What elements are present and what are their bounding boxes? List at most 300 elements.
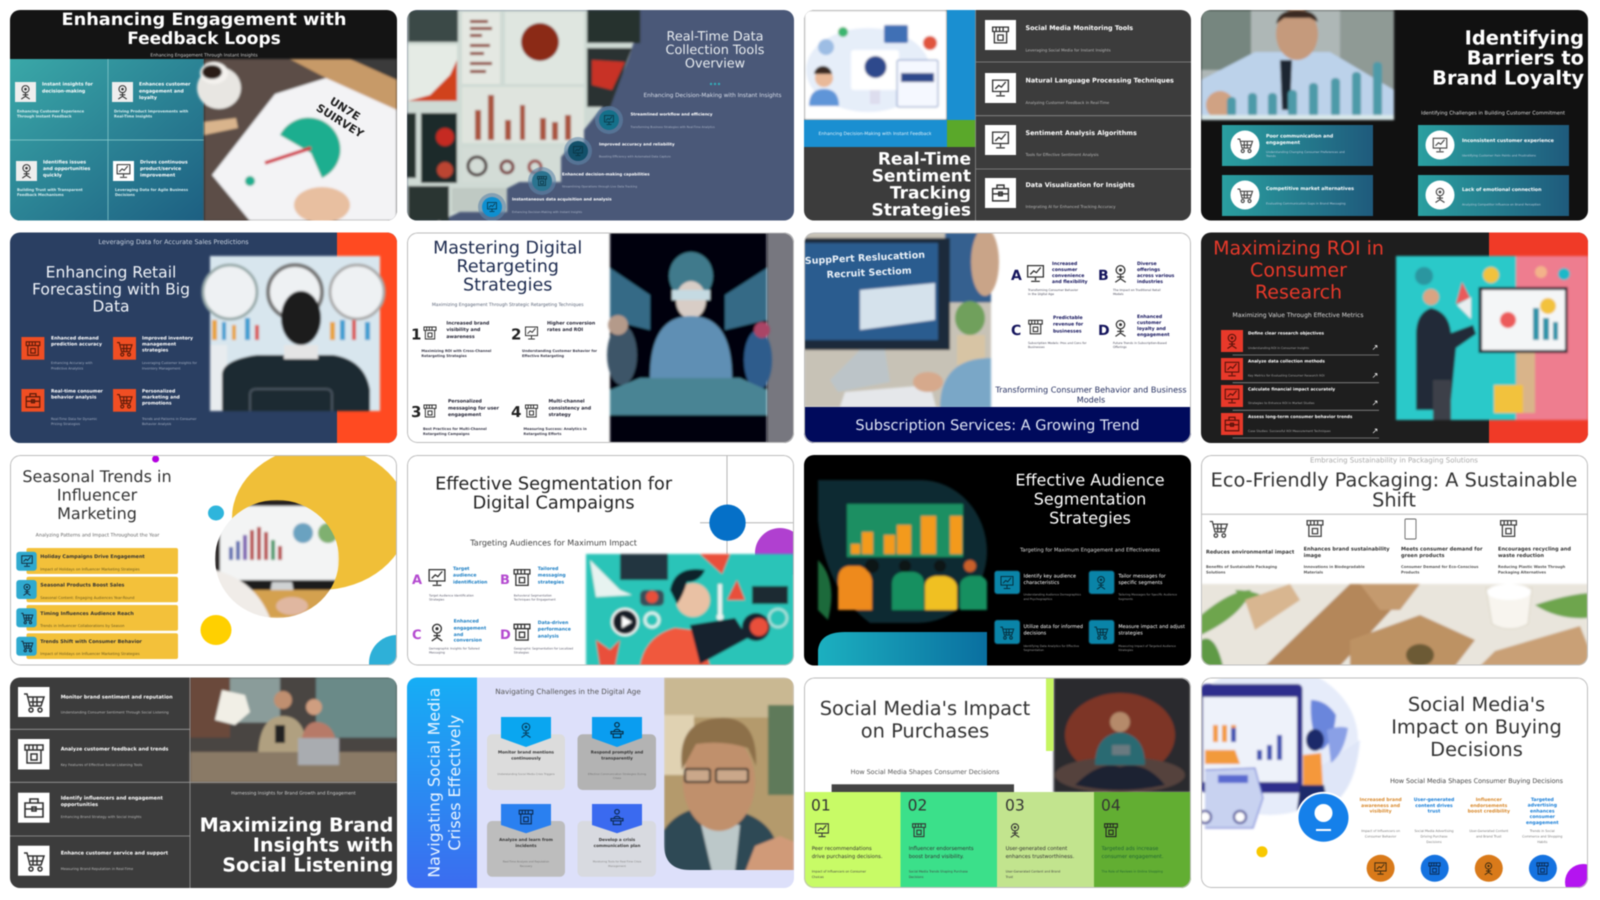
text: issues: quickly bbox=[43, 172, 62, 178]
blue band bbox=[407, 678, 477, 888]
item: inventory: Inventory Management bbox=[142, 366, 181, 370]
title: Influencer bbox=[57, 486, 138, 504]
title: Decisions bbox=[1430, 738, 1523, 761]
item D: Geographic Segmentation for Localized bbox=[514, 646, 573, 650]
item: demand: Predictive Analytics bbox=[51, 366, 84, 370]
bar: timing: Trends in Influencer Collaborations by Season bbox=[39, 624, 125, 628]
item: decisions: Streamlining Operations through Live Data Tracking bbox=[562, 184, 637, 188]
item B: Tailored bbox=[538, 566, 558, 572]
subtitle: Harnessing Insights for Brand Growth and Engagement bbox=[231, 790, 356, 796]
orange band bbox=[337, 232, 397, 443]
item D: D bbox=[1098, 323, 1110, 339]
purple corner bbox=[1565, 864, 1600, 900]
item C: Messaging bbox=[429, 650, 445, 654]
bar: trends bbox=[16, 633, 178, 659]
item D: D bbox=[500, 628, 511, 643]
item 2: Effective Retargeting bbox=[522, 354, 564, 358]
panel: Real-Time Sentiment Tracking Strategies bbox=[804, 10, 1191, 221]
item: workflow: Streamlined workflow and efficiency bbox=[630, 112, 713, 116]
item: real-time behavior: behavior analysis bbox=[51, 394, 97, 400]
column 03: Trust bbox=[1005, 875, 1014, 879]
panel: Social Media's Impact on Purchases bbox=[804, 678, 1191, 888]
item B: Diverse bbox=[1137, 261, 1157, 267]
column: environmental impact bbox=[1206, 522, 1295, 574]
yellow blob bbox=[232, 446, 408, 590]
column: brand sustainability: Materials bbox=[1304, 570, 1324, 574]
item C: Enhanced bbox=[454, 618, 479, 624]
item: personalized marketing: Trends and Patterns in Consumer bbox=[141, 417, 197, 421]
card: respond promptly bbox=[578, 717, 656, 790]
item: real-time behavior: Pricing Strategies bbox=[51, 422, 80, 426]
item 1: awareness bbox=[446, 335, 475, 340]
card: respond promptly: transparently bbox=[601, 756, 633, 761]
panel: Effective Segmentation for Digital Campaigns bbox=[407, 455, 805, 666]
card: analyze incidents: Real-Time Analysis and Reputation bbox=[503, 860, 550, 864]
item: utilize data: Utilize data for informed bbox=[1024, 624, 1083, 630]
column: user-generated trust: trust bbox=[1428, 808, 1441, 814]
row: long-term trends bbox=[1221, 413, 1379, 438]
card: competitive alternatives: Competitive market alternatives bbox=[1266, 186, 1354, 192]
icon: continuous improvement bbox=[113, 161, 134, 181]
item: data visualization: Integrating AI for Enhanced Tracking Accuracy bbox=[1026, 204, 1116, 209]
row: methods: Key Metrics for Evaluating Consumer Research ROI bbox=[1248, 374, 1325, 378]
title: Consumer bbox=[1250, 260, 1347, 282]
title: Social Listening bbox=[222, 854, 393, 876]
icon: workflow bbox=[595, 106, 623, 134]
illustration: videographer bbox=[586, 554, 794, 666]
column: user-generated trust bbox=[1414, 797, 1454, 882]
column 02: Decisions bbox=[909, 875, 924, 879]
item: characteristics: and Psychographics bbox=[1024, 597, 1053, 601]
subtitle: Navigating Challenges in the Digital Age bbox=[495, 687, 641, 696]
item B: Models bbox=[1113, 292, 1124, 296]
row: feedback bbox=[18, 739, 168, 770]
caption: instant insights: Through Instant Feedback bbox=[17, 114, 72, 118]
panel: Seasonal Trends in Influencer Marketing bbox=[10, 446, 425, 691]
item D: Strategies bbox=[514, 650, 530, 654]
title: Shift bbox=[1372, 488, 1416, 512]
item 2 bbox=[511, 320, 597, 358]
item 3: Personalized bbox=[448, 398, 482, 404]
item B: industries bbox=[1137, 279, 1163, 285]
bar: seasonal products: Seasonal Products Boost Sales bbox=[40, 582, 124, 588]
column: influencer credibility bbox=[1468, 797, 1510, 882]
title: Maximizing Brand bbox=[200, 814, 393, 836]
card: analyze incidents bbox=[487, 804, 565, 877]
icon: data visualization bbox=[985, 178, 1016, 208]
row: financial impact bbox=[1221, 385, 1379, 410]
title: Subscription Services: A Growing Trend bbox=[855, 418, 1140, 434]
item 1: Maximizing ROI with Cross-Channel bbox=[421, 349, 491, 353]
item: sentiment: Sentiment Analysis Algorithms bbox=[1026, 129, 1137, 137]
item: acquisition: Enhancing Decision-Making with Instant Insights bbox=[512, 210, 583, 214]
photo: man overwhelmed by apps bbox=[1054, 678, 1191, 793]
title: Tracking bbox=[890, 184, 971, 204]
row: objectives: ↗ bbox=[1372, 343, 1378, 352]
column: consumer demand: Meets consumer demand for bbox=[1401, 546, 1483, 552]
column: brand awareness: visibility bbox=[1370, 808, 1392, 814]
column 01: Impact of Influencers on Consumer bbox=[812, 870, 867, 874]
column: brand awareness: awareness and bbox=[1361, 803, 1400, 809]
column: recycling: Encourages recycling and bbox=[1498, 546, 1571, 552]
text: customer engagement: Enhances customer bbox=[139, 82, 191, 88]
item: social monitoring: Leveraging Social Media for Instant Insights bbox=[1026, 48, 1111, 52]
item C: C bbox=[1011, 323, 1021, 339]
dark bar bbox=[832, 784, 1014, 792]
yellow dot bbox=[1256, 846, 1268, 857]
item: characteristics: characteristics bbox=[1024, 580, 1060, 586]
column: influencer credibility: boost credibility bbox=[1468, 808, 1510, 814]
card: poor communication: engagement bbox=[1266, 140, 1301, 146]
item C: revenue for bbox=[1053, 322, 1084, 328]
item: measure impact: Measure impact and adjust bbox=[1118, 624, 1185, 630]
caption: issues: Building Trust with Transparent bbox=[17, 188, 83, 192]
bar: holiday: Impact of Holidays on Influencer Marketing Strategies bbox=[40, 568, 140, 572]
illustration: chatbot bbox=[804, 10, 947, 120]
item: tailor messages: specific segments bbox=[1118, 580, 1163, 586]
icon: accuracy bbox=[564, 137, 592, 165]
card border bbox=[804, 233, 1190, 442]
column: brand sustainability: Innovations in Biodegradable bbox=[1304, 565, 1365, 569]
item: measure impact: Measuring Impact of Targeted Audience bbox=[1118, 644, 1176, 648]
subtitle: Transforming Consumer Behavior and Business bbox=[994, 384, 1187, 394]
subtitle: Models bbox=[1077, 394, 1105, 404]
item A bbox=[1011, 261, 1088, 296]
decorative lines bbox=[700, 455, 794, 554]
title: Eco-Friendly Packaging: A Sustainable bbox=[1211, 468, 1577, 492]
item: demand: prediction accuracy bbox=[51, 342, 102, 348]
row: influencers: Identify influencers and engagement bbox=[61, 795, 163, 801]
item: personalized marketing: promotions bbox=[142, 400, 172, 406]
item B: strategies bbox=[538, 580, 564, 586]
item: demand: Enhanced demand bbox=[51, 336, 99, 342]
subtitle: Maximizing Value Through Effective Metrics bbox=[1233, 312, 1363, 319]
item: accuracy: Boosting Efficiency with Automated Data Capture bbox=[599, 154, 671, 158]
column: brand awareness bbox=[1360, 797, 1402, 882]
grid dividers bbox=[10, 59, 204, 220]
item: tailor messages: Tailor messages for bbox=[1117, 574, 1167, 580]
column: environmental impact: Reduces environmental impact bbox=[1206, 550, 1295, 556]
title: Collection Tools bbox=[666, 43, 765, 58]
item C: engagement bbox=[454, 626, 487, 632]
item A: identification bbox=[453, 580, 487, 586]
title: Effective Segmentation for bbox=[435, 474, 673, 494]
title: Enhancing Retail bbox=[46, 264, 176, 282]
item 3: Retargeting Campaigns bbox=[423, 432, 470, 436]
column: recycling: Packaging Alternatives bbox=[1498, 570, 1547, 574]
photo: kraft packaging bbox=[1201, 584, 1588, 666]
column: recycling: Reducing Plastic Waste Through bbox=[1498, 565, 1566, 569]
item 1: 1 bbox=[411, 326, 421, 344]
item: measure impact bbox=[1089, 620, 1185, 652]
row: long-term trends: Assess long-term consumer behavior trends bbox=[1248, 414, 1353, 419]
card: poor communication: Poor communication and bbox=[1266, 134, 1334, 140]
item: utilize data bbox=[994, 620, 1083, 652]
item B: across various bbox=[1137, 273, 1175, 279]
row: feedback: Key Features of Effective Social Listening Tools bbox=[61, 763, 142, 767]
subtitle: Enhancing Decision-Making with Instant Insights bbox=[644, 92, 781, 99]
item D: loyalty and bbox=[1137, 326, 1166, 332]
card: competitive alternatives: Evaluating Communication Gaps in Brand Messaging bbox=[1266, 202, 1346, 206]
icon: personalized marketing bbox=[113, 389, 136, 412]
item C: Demographic Insights for Tailored bbox=[429, 646, 480, 650]
column: user-generated trust: Social Media Advertising bbox=[1414, 829, 1454, 833]
card: respond promptly: Crises bbox=[613, 776, 622, 780]
item: personalized marketing: marketing and bbox=[142, 394, 180, 400]
row: financial impact: ↗ bbox=[1372, 398, 1378, 408]
item B: offerings bbox=[1137, 267, 1160, 273]
subtitle: Maximizing Engagement Through Strategic Retargeting Techniques bbox=[432, 302, 584, 308]
title: Maximizing ROI in bbox=[1213, 238, 1384, 260]
row: financial impact: Strategies to Enhance ROI in Market Studies bbox=[1248, 401, 1315, 405]
item 3 bbox=[411, 398, 500, 436]
bar: timing: Timing Influences Audience Reach bbox=[40, 611, 134, 617]
item D: Future Trends in Subscription-Based bbox=[1113, 341, 1167, 345]
column 03: User-Generated Content and Brand bbox=[1006, 870, 1060, 874]
column: targeted advertising: advertising bbox=[1528, 803, 1557, 809]
item D bbox=[1098, 314, 1170, 349]
panel: Identifying Barriers to Brand Loyalty bbox=[1201, 8, 1588, 220]
card: crisis plan: Develop a crisis bbox=[599, 837, 636, 842]
item 2: rates and ROI bbox=[547, 327, 583, 333]
divider bbox=[1201, 513, 1588, 515]
card: emotional connection bbox=[1418, 175, 1569, 216]
column 01: Peer recommendations bbox=[812, 846, 872, 852]
card border bbox=[804, 678, 1190, 888]
item D: engagement bbox=[1137, 332, 1170, 338]
illustration: audience watching chart bbox=[818, 480, 987, 623]
row: sentiment: Monitor brand sentiment and reputation bbox=[61, 694, 173, 700]
item 4: strategy bbox=[548, 412, 571, 418]
row: methods: Analyze data collection methods bbox=[1248, 358, 1325, 364]
teal shape bbox=[818, 632, 987, 666]
item 1: Retargeting Strategies bbox=[421, 354, 467, 358]
item 3: engagement bbox=[448, 412, 482, 418]
text: continuous improvement: Drives continuous bbox=[140, 160, 188, 166]
item: inventory: strategies bbox=[142, 348, 169, 354]
photo: creators in studio bbox=[190, 678, 397, 782]
subtitle: Targeting for Maximum Engagement and Effectiveness bbox=[1019, 548, 1160, 554]
title: Insights with bbox=[253, 834, 393, 856]
item C bbox=[1011, 315, 1087, 349]
caption: issues: Feedback Mechanisms bbox=[17, 193, 64, 197]
item C: businesses bbox=[1053, 328, 1082, 334]
rotated title line two: Crises Effectively bbox=[445, 715, 464, 851]
item C: C bbox=[412, 628, 422, 643]
item A: Target Audience Identification bbox=[428, 594, 474, 598]
subtitle: Targeting Audiences for Maximum Impact bbox=[469, 538, 637, 548]
row: customer service: Measuring Brand Reputation in Real-Time bbox=[61, 867, 133, 871]
item: NLP: Analyzing Customer Feedback in Real-Time bbox=[1026, 100, 1110, 105]
column: consumer demand: Products bbox=[1401, 570, 1420, 574]
column: user-generated trust: Decisions bbox=[1426, 840, 1442, 844]
item: NLP: Natural Language Processing Techniques bbox=[1026, 76, 1174, 84]
title: Strategies bbox=[463, 276, 552, 296]
item: measure impact: Strategies bbox=[1118, 648, 1134, 652]
row: methods: ↗ bbox=[1372, 371, 1378, 380]
column: recycling bbox=[1498, 521, 1571, 574]
item: measure impact: strategies bbox=[1118, 630, 1143, 636]
subtitle: How Social Media Shapes Consumer Buying Decisions bbox=[1390, 777, 1564, 785]
item 1 bbox=[411, 320, 491, 358]
item A bbox=[412, 566, 487, 602]
item: accuracy: Improved accuracy and reliability bbox=[599, 142, 675, 146]
subtitle: Identifying Challenges in Building Customer Commitment bbox=[1421, 110, 1565, 116]
column: consumer demand bbox=[1401, 519, 1483, 574]
subtitle: Enhancing Decision-Making with Instant Feedback bbox=[819, 131, 932, 137]
bar: trends: Trends Shift with Consumer Behavior bbox=[40, 639, 142, 645]
blue bands bbox=[804, 10, 976, 147]
item A: Target bbox=[453, 566, 470, 572]
title: Marketing bbox=[57, 504, 137, 523]
illustration: analytics tablet and shopper bbox=[1182, 665, 1360, 828]
blue circle bbox=[709, 504, 746, 541]
item 4: Retargeting Efforts bbox=[524, 432, 561, 436]
item C: Subscription Models: Pros and Cons for bbox=[1028, 341, 1087, 345]
green accent bbox=[947, 120, 976, 147]
purple circle bbox=[755, 528, 805, 578]
bar: timing bbox=[16, 605, 178, 631]
row: influencers: opportunities bbox=[61, 802, 98, 808]
column: targeted advertising bbox=[1522, 797, 1562, 882]
card: crisis plan: communication plan bbox=[594, 843, 640, 848]
item B: B bbox=[1098, 268, 1109, 284]
subtitle: Leveraging Data for Accurate Sales Predictions bbox=[98, 238, 249, 246]
column: user-generated trust: Driving Purchase bbox=[1421, 834, 1448, 838]
item: characteristics bbox=[994, 571, 1082, 601]
item A: A bbox=[412, 573, 422, 588]
title: Retargeting bbox=[456, 257, 559, 277]
photo: subscription form on monitor bbox=[804, 228, 999, 408]
title: Research bbox=[1255, 282, 1342, 304]
column: brand sustainability: image bbox=[1304, 553, 1322, 559]
column: brand awareness: Impact of Influencers on bbox=[1361, 829, 1400, 833]
card: inconsistent experience bbox=[1418, 125, 1569, 166]
row: long-term trends: ↗ bbox=[1372, 426, 1378, 436]
column: user-generated trust: User-generated bbox=[1414, 797, 1454, 803]
card border bbox=[10, 456, 396, 665]
text: issues: and opportunities bbox=[43, 166, 90, 172]
row: feedback: Analyze customer feedback and trends bbox=[61, 746, 168, 752]
title: Impact on Buying bbox=[1391, 716, 1562, 738]
column 01: 01 bbox=[811, 796, 831, 814]
item: demand: Enhancing Accuracy with bbox=[51, 361, 92, 365]
column: targeted advertising: Habits bbox=[1537, 840, 1548, 844]
panel: Enhancing Engagement with Feedback Loops bbox=[10, 10, 397, 223]
title: Forecasting with Big bbox=[32, 280, 190, 298]
item D: Data-driven bbox=[538, 620, 568, 626]
item B: Techniques for Engagement bbox=[513, 598, 556, 602]
item: decisions: Enhanced decision-making capabilities bbox=[562, 172, 650, 176]
icon: instant insights bbox=[15, 82, 36, 102]
panel: Effective Audience Segmentation Strategies bbox=[804, 455, 1191, 666]
item: characteristics: Identify key audience bbox=[1024, 574, 1076, 580]
bar: seasonal products: Seasonal Content: Engaging Audiences Year-Round bbox=[40, 596, 135, 600]
photo: analytics monitor bbox=[215, 500, 339, 618]
title: Digital Campaigns bbox=[473, 494, 635, 514]
column: targeted advertising: Targeted bbox=[1531, 797, 1554, 803]
item 2: Higher conversion bbox=[547, 320, 595, 326]
card: analyze incidents: incidents bbox=[515, 843, 537, 848]
item: personalized marketing: Behavior Analysis bbox=[142, 422, 172, 426]
card: inconsistent experience: Inconsistent customer experience bbox=[1462, 138, 1555, 144]
column: targeted advertising: Trends in Social bbox=[1529, 829, 1555, 833]
item: utilize data: decisions bbox=[1024, 630, 1047, 636]
card: crisis plan: Management bbox=[608, 864, 626, 868]
subtitle: Enhancing Engagement Through Instant Insights bbox=[150, 52, 258, 58]
card: monitor mentions: continuously bbox=[511, 756, 541, 761]
row: influencers bbox=[18, 793, 163, 823]
item D: performance bbox=[538, 626, 571, 632]
item: workflow: Transforming Business Strategies with Real-Time Analytics bbox=[630, 125, 715, 129]
card: poor communication: Understanding Changing Consumer Preferences and bbox=[1266, 150, 1345, 154]
item 4: consistency and bbox=[548, 406, 591, 412]
caption: customer engagement: Real-Time Insights bbox=[114, 114, 153, 118]
column 02: Influencer endorsements bbox=[909, 846, 974, 852]
title: Strategies bbox=[871, 200, 971, 220]
row: objectives: Define clear research objectives bbox=[1248, 330, 1324, 336]
photo: worried man bbox=[664, 678, 794, 872]
card border bbox=[408, 456, 794, 665]
text: instant insights: Instant insights for bbox=[42, 82, 93, 88]
row: sentiment: Understanding Consumer Sentiment Through Social Listening bbox=[61, 711, 169, 715]
column: user-generated trust: content drives bbox=[1415, 803, 1453, 809]
row: long-term trends: Case Studies: Successful ROI Measurement Techniques bbox=[1248, 429, 1331, 433]
row: financial impact: Calculate financial impact accurately bbox=[1248, 386, 1335, 392]
item 3: 3 bbox=[411, 403, 421, 421]
column: environmental impact: Benefits of Sustainable Packaging bbox=[1206, 565, 1277, 569]
card: respond promptly: Respond promptly and bbox=[591, 750, 643, 755]
panel title line two: Feedback Loops bbox=[127, 29, 281, 49]
item A: in the Digital Age bbox=[1028, 292, 1054, 296]
item: inventory: Leveraging Customer Insights for bbox=[142, 361, 198, 365]
column: targeted advertising: Commerce and Shopping bbox=[1522, 834, 1562, 838]
panel: Maximizing Brand Insights with Social Listening bbox=[10, 678, 397, 888]
caption: instant insights: Enhancing Customer Experience bbox=[17, 110, 85, 114]
item A: consumer bbox=[1052, 268, 1078, 273]
text: issues: Identifies issues bbox=[43, 160, 86, 166]
item 4: Measuring Success: Analytics in bbox=[524, 427, 587, 431]
item C: and bbox=[454, 632, 463, 638]
item 2: 2 bbox=[511, 326, 521, 344]
photo: businessman with figures bbox=[1201, 8, 1394, 120]
column 02: boost brand visibility. bbox=[909, 854, 964, 860]
item D: analysis bbox=[538, 634, 559, 640]
item: sentiment: Tools for Effective Sentiment Analysis bbox=[1024, 152, 1098, 157]
column 01: Choices bbox=[812, 875, 824, 879]
title: Brand Loyalty bbox=[1432, 66, 1584, 90]
item C: conversion bbox=[454, 638, 482, 644]
row: objectives: Understanding ROI in Consumer Insights bbox=[1248, 346, 1309, 350]
title: Data bbox=[92, 298, 130, 316]
column 04: consumer engagement. bbox=[1102, 854, 1164, 860]
caption: continuous improvement: Leveraging Data for Agile Business bbox=[115, 188, 189, 192]
item: characteristics: Understanding Audience Demographics bbox=[1024, 593, 1082, 597]
item 1: visibility and bbox=[446, 327, 480, 333]
item D: Enhanced bbox=[1137, 314, 1162, 320]
item: inventory: Improved inventory bbox=[142, 336, 193, 342]
teal grid bbox=[10, 59, 204, 220]
red band bbox=[1489, 232, 1588, 443]
card: poor communication: Trends bbox=[1265, 154, 1276, 158]
item B: The Impact on Traditional Retail bbox=[1112, 288, 1161, 292]
item: acquisition: Instantaneous data acquisition and analysis bbox=[512, 196, 612, 202]
title: Seasonal Trends in bbox=[22, 467, 172, 486]
panel: Mastering Digital Retargeting Strategies bbox=[407, 232, 794, 443]
title: Segmentation bbox=[1034, 490, 1146, 508]
row: objectives bbox=[1221, 330, 1379, 355]
item A: audience bbox=[453, 572, 476, 578]
